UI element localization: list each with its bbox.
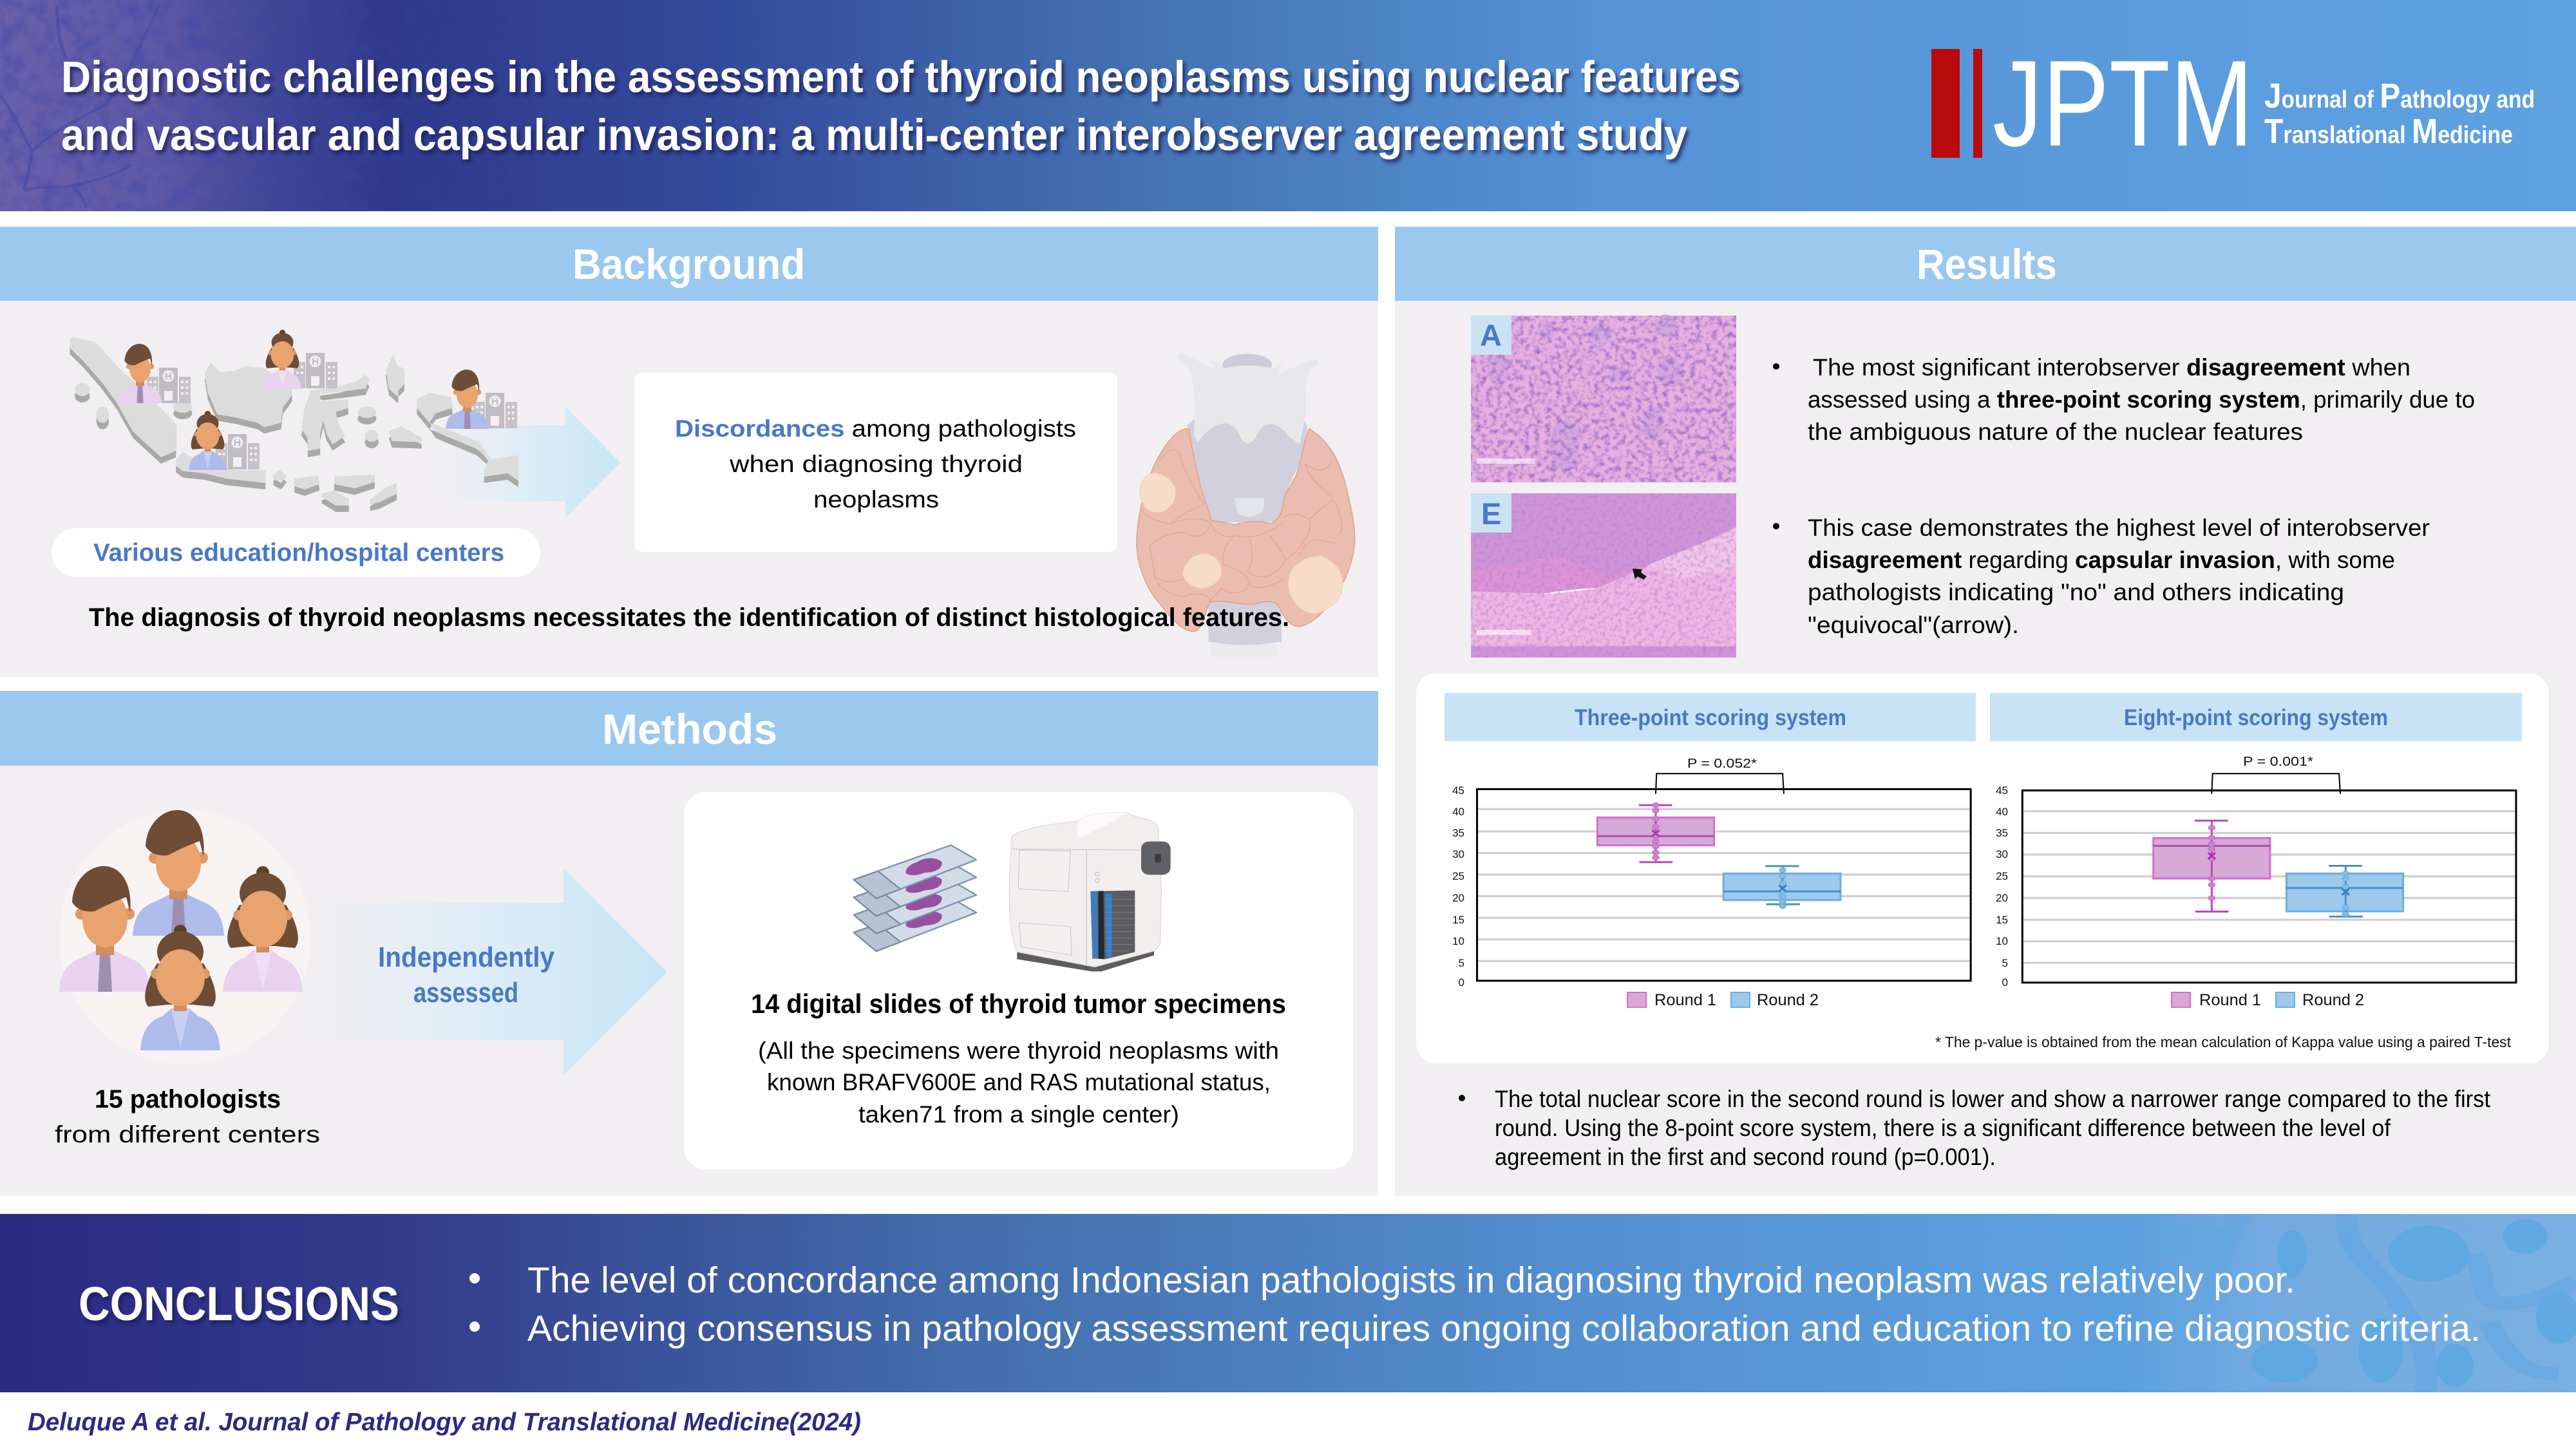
chart: eight-point box plot: [1996, 755, 2516, 1009]
title: [61, 52, 1741, 160]
chart: three-point box plot: 0: [1459, 976, 1464, 989]
icon: map of Indonesia with centers: [70, 330, 518, 506]
chart: eight-point box plot: 35: [1996, 827, 2008, 839]
text: slide details: (All the specimens were thyroid neoplasms with: [758, 1037, 1279, 1064]
journal logo: Translational Medicine: [2264, 112, 2513, 151]
text: slide heading: 14 digital slides of thyroid tumor specimens: [751, 989, 1286, 1019]
callout: discordances: [634, 372, 1117, 552]
image: histology A: [1471, 314, 1736, 482]
chart: three-point box plot: [1452, 757, 1971, 1009]
heading: three-point: Three-point scoring system: [1575, 705, 1846, 730]
header banner: [0, 0, 2576, 211]
text: nuclear score summary: round. Using the 8-point score system, there is a significant difference between the level of: [1495, 1115, 2391, 1141]
text: finding on nuclear features: The most significant interobserver disagreement when: [1813, 354, 2410, 381]
footnote: * The p-value is obtained from the mean calculation of Kappa value using a paired T-test: [1935, 1034, 2512, 1050]
chart: three-point box plot: 30: [1452, 848, 1464, 860]
text: finding on capsular invasion: disagreement regarding capsular invasion, with some: [1808, 547, 2395, 573]
title: Diagnostic challenges in the assessment of thyroid neoplasms using nuclear features: [61, 52, 1741, 102]
text: slide details: taken71 from a single center): [858, 1101, 1179, 1128]
panel: charts: [1416, 674, 2549, 1063]
arrow: map to discordances: [444, 407, 620, 518]
panel: methods: [0, 691, 1378, 1196]
text: nuclear score summary: [1459, 1086, 2491, 1170]
citation: Deluque A et al. Journal of Pathology and Translational Medicine(2024): [28, 1408, 861, 1436]
callout: discordances: neoplasms: [813, 486, 939, 513]
arrow: independently assessed: Independently: [378, 942, 554, 973]
text: diagnosis statement: The diagnosis of thyroid neoplasms necessitates the identification of distinct histological features.: [89, 603, 1289, 632]
chart: eight-point box plot: 5: [2002, 957, 2008, 969]
text: 15 pathologists: 15 pathologists: [95, 1085, 281, 1113]
title: and vascular and capsular invasion: a multi-center interobserver agreement study: [61, 110, 1687, 160]
text: conclusion points: Achieving consensus in pathology assessment requires ongoing collaboration and education to refine diagnostic criteria.: [527, 1308, 2481, 1349]
methods heading: Methods: [602, 705, 777, 753]
text: nuclear score summary: agreement in the first and second round (p=0.001).: [1495, 1144, 1996, 1170]
heading: three-point: [1444, 693, 1976, 741]
results heading: Results: [1917, 240, 2057, 288]
text: finding on nuclear features: the ambiguous nature of the nuclear features: [1808, 419, 2303, 445]
text: finding on nuclear features: [1773, 354, 2475, 445]
chart: three-point box plot: 10: [1452, 935, 1464, 947]
text: conclusion points: [469, 1260, 2481, 1349]
chart: eight-point box plot: 45: [1996, 784, 2008, 797]
panel: results: [1395, 227, 2576, 1196]
chart: eight-point box plot: P = 0.001*: [2243, 755, 2313, 769]
chart: three-point box plot: 5: [1459, 957, 1464, 969]
label: education centers pill: [52, 528, 540, 577]
chart: eight-point box plot: 25: [1996, 870, 2008, 882]
legend: three-point: Round 1: [1654, 991, 1716, 1009]
icon: thyroid gland: [1137, 353, 1355, 657]
conclusions heading: CONCLUSIONS: [79, 1277, 399, 1331]
text: 15 pathologists: [55, 1085, 320, 1148]
results heading: [1395, 227, 2576, 301]
icon: slides and scanner: [854, 813, 1171, 971]
panel: conclusions: [0, 1214, 2576, 1396]
image: histology E: E: [1481, 497, 1501, 531]
text: finding on nuclear features: assessed using a three-point scoring system, primarily due to: [1808, 386, 2475, 413]
chart: three-point box plot: P = 0.052*: [1687, 757, 1757, 771]
image: histology E: [1471, 493, 1736, 658]
arrow: independently assessed: assessed: [413, 977, 518, 1009]
chart: three-point box plot: 45: [1452, 784, 1464, 797]
text: conclusion points: The level of concordance among Indonesian pathologists in diagnosing thyroid neoplasm was relatively poor.: [527, 1260, 2295, 1301]
image: histology A: A: [1480, 318, 1502, 352]
legend: eight-point: [2172, 991, 2364, 1009]
chart: eight-point box plot: 0: [2002, 976, 2008, 989]
chart: three-point box plot: 15: [1452, 914, 1464, 926]
legend: three-point: [1627, 991, 1819, 1009]
panel: digital slides: [684, 792, 1353, 1170]
legend: eight-point: Round 1: [2199, 991, 2261, 1009]
legend: eight-point: Round 2: [2302, 991, 2364, 1009]
methods heading: [0, 691, 1378, 766]
chart: three-point box plot: 20: [1452, 892, 1464, 904]
text: finding on capsular invasion: This case demonstrates the highest level of interobserver: [1808, 515, 2430, 541]
icon: group of pathologists: [59, 810, 310, 1065]
text: slide details: known BRAFV600E and RAS mutational status,: [767, 1069, 1271, 1095]
arrow: independently assessed: [316, 868, 667, 1075]
journal logo: [1931, 35, 2535, 172]
chart: eight-point box plot: 30: [1996, 848, 2008, 860]
background heading: Background: [573, 240, 805, 288]
label: education centers pill: Various education/hospital centers: [93, 539, 504, 567]
text: finding on capsular invasion: "equivocal"(arrow).: [1808, 612, 2019, 638]
chart: three-point box plot: 35: [1452, 827, 1464, 839]
chart: three-point box plot: 40: [1452, 806, 1464, 818]
text: slide details: [758, 1037, 1279, 1128]
heading: eight-point: [1990, 693, 2522, 741]
chart: three-point box plot: 25: [1452, 870, 1464, 882]
chart: eight-point box plot: 15: [1996, 914, 2008, 926]
text: finding on capsular invasion: [1773, 515, 2430, 638]
journal logo: Journal of Pathology and: [2264, 77, 2535, 115]
callout: discordances: Discordances among pathologists: [675, 415, 1076, 442]
text: 15 pathologists: from different centers: [55, 1121, 320, 1148]
panel: background: [0, 227, 1378, 677]
chart: eight-point box plot: 40: [1996, 806, 2008, 818]
text: nuclear score summary: The total nuclear score in the second round is lower and show a narrower range compared to the first: [1495, 1086, 2491, 1112]
journal logo: JPTM: [1993, 35, 2253, 172]
text: finding on capsular invasion: pathologists indicating "no" and others indicating: [1808, 579, 2344, 605]
heading: eight-point: Eight-point scoring system: [2124, 705, 2388, 730]
chart: eight-point box plot: 10: [1996, 935, 2008, 947]
callout: discordances: when diagnosing thyroid: [729, 451, 1023, 477]
background heading: [0, 227, 1378, 301]
legend: three-point: Round 2: [1757, 991, 1819, 1009]
chart: eight-point box plot: 20: [1996, 892, 2008, 904]
